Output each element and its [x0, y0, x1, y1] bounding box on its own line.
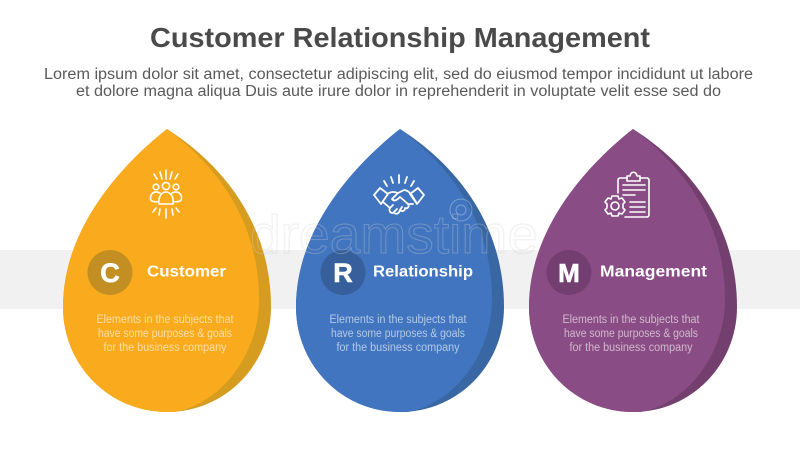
label: Management: Management: [600, 264, 708, 280]
description text: have some purposes & goals: [331, 328, 465, 340]
letter badge M: [546, 250, 592, 295]
description text: Elements in the subjects that: [96, 314, 234, 326]
description text: Elements in the subjects that: [562, 314, 700, 326]
background band: [0, 250, 800, 309]
letter badge M: M: [558, 258, 580, 288]
letter badge R: [320, 250, 366, 295]
watermark: dreamstime: [250, 205, 538, 265]
description text: Elements in the subjects that: [330, 314, 467, 326]
title: Customer Relationship Management: [150, 22, 650, 53]
description text: [330, 314, 467, 354]
panel: relationship: [296, 129, 504, 412]
icon: clipboard and gear: [605, 172, 649, 217]
watermark: dreamstime: [250, 205, 538, 265]
description text: have some purposes & goals: [564, 328, 698, 340]
description text: for the business company: [104, 342, 227, 354]
letter badge C: [88, 250, 132, 295]
drop front: [296, 129, 492, 412]
description text: have some purposes & goals: [98, 328, 232, 340]
label: Relationship: Relationship: [373, 264, 473, 280]
description text: for the business company: [570, 342, 693, 354]
letter badge C: C: [100, 258, 120, 288]
subtitle text block: Lorem ipsum dolor sit amet, consectetur adipiscing elit, sed do eiusmod tempor incididunt ut labore: [44, 66, 753, 83]
letter badge R: R: [333, 258, 353, 288]
description text: [562, 314, 700, 354]
drop front: [529, 129, 725, 412]
subtitle text block: [44, 66, 753, 100]
description text: for the business company: [336, 342, 460, 354]
icon: handshake: [374, 175, 424, 214]
drop front: [63, 129, 259, 412]
subtitle text block: et dolore magna aliqua Duis aute irure dolor in reprehenderit in voluptate velit esse sed do: [76, 83, 721, 100]
panel: management: [529, 129, 737, 412]
label: Customer: Customer: [147, 264, 226, 280]
drop shadow side: [296, 129, 504, 412]
panel: customer: [63, 129, 271, 412]
description text: [96, 314, 234, 354]
icon: people group: [150, 170, 182, 218]
drop shadow side: [63, 129, 271, 412]
drop shadow side: [529, 129, 737, 412]
